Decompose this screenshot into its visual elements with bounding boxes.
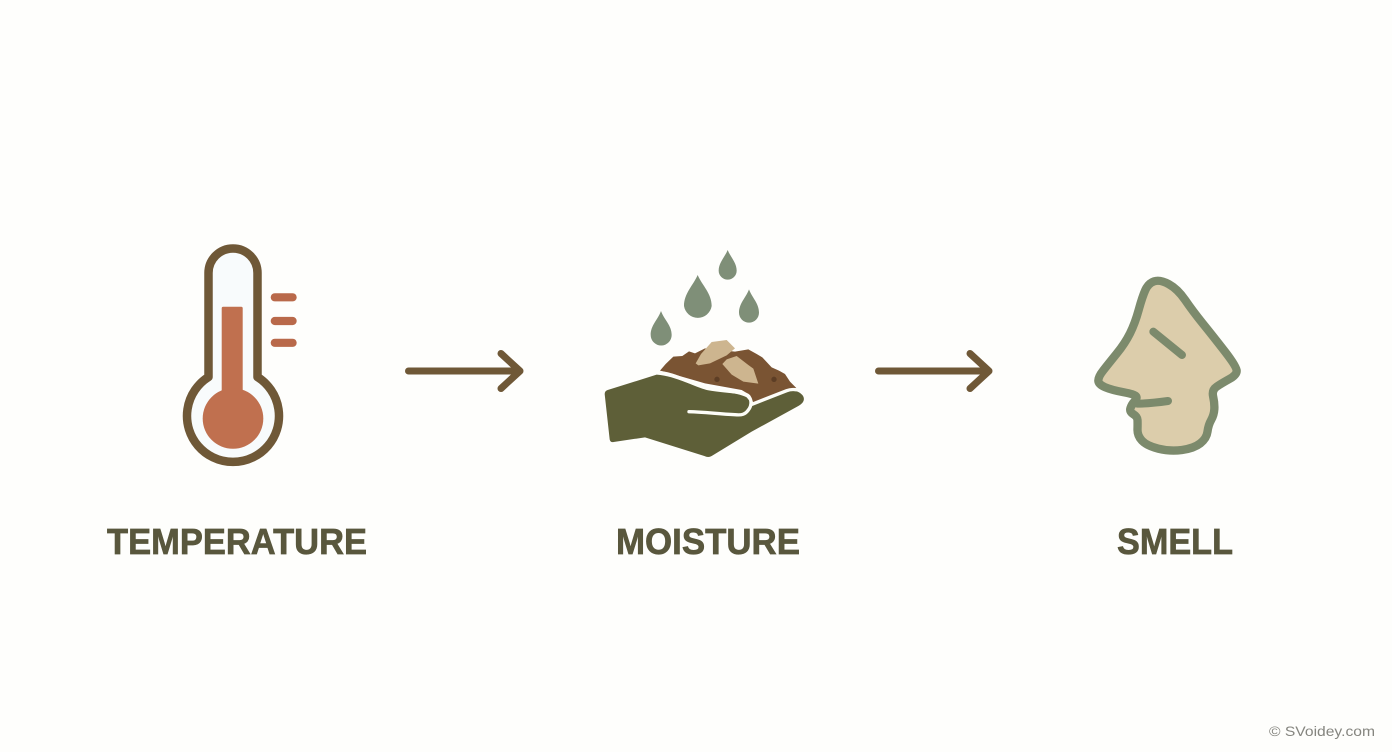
label: smell: SMELL (1117, 521, 1233, 562)
icon: face profile with nose (1098, 281, 1237, 451)
label: moisture: MOISTURE (616, 521, 800, 562)
hand outlines (660, 373, 796, 415)
arrow: temperature to moisture (408, 354, 520, 388)
watermark: © SVoidey.com (1269, 723, 1375, 739)
icon: hand holding soil with water drops (605, 250, 804, 457)
label: temperature: TEMPERATURE (107, 521, 367, 562)
water drops (651, 250, 759, 345)
soil mound (660, 348, 796, 407)
icon: thermometer (187, 248, 297, 462)
hand (605, 375, 804, 457)
rocks (696, 340, 735, 365)
arrow: moisture to smell (878, 354, 989, 388)
